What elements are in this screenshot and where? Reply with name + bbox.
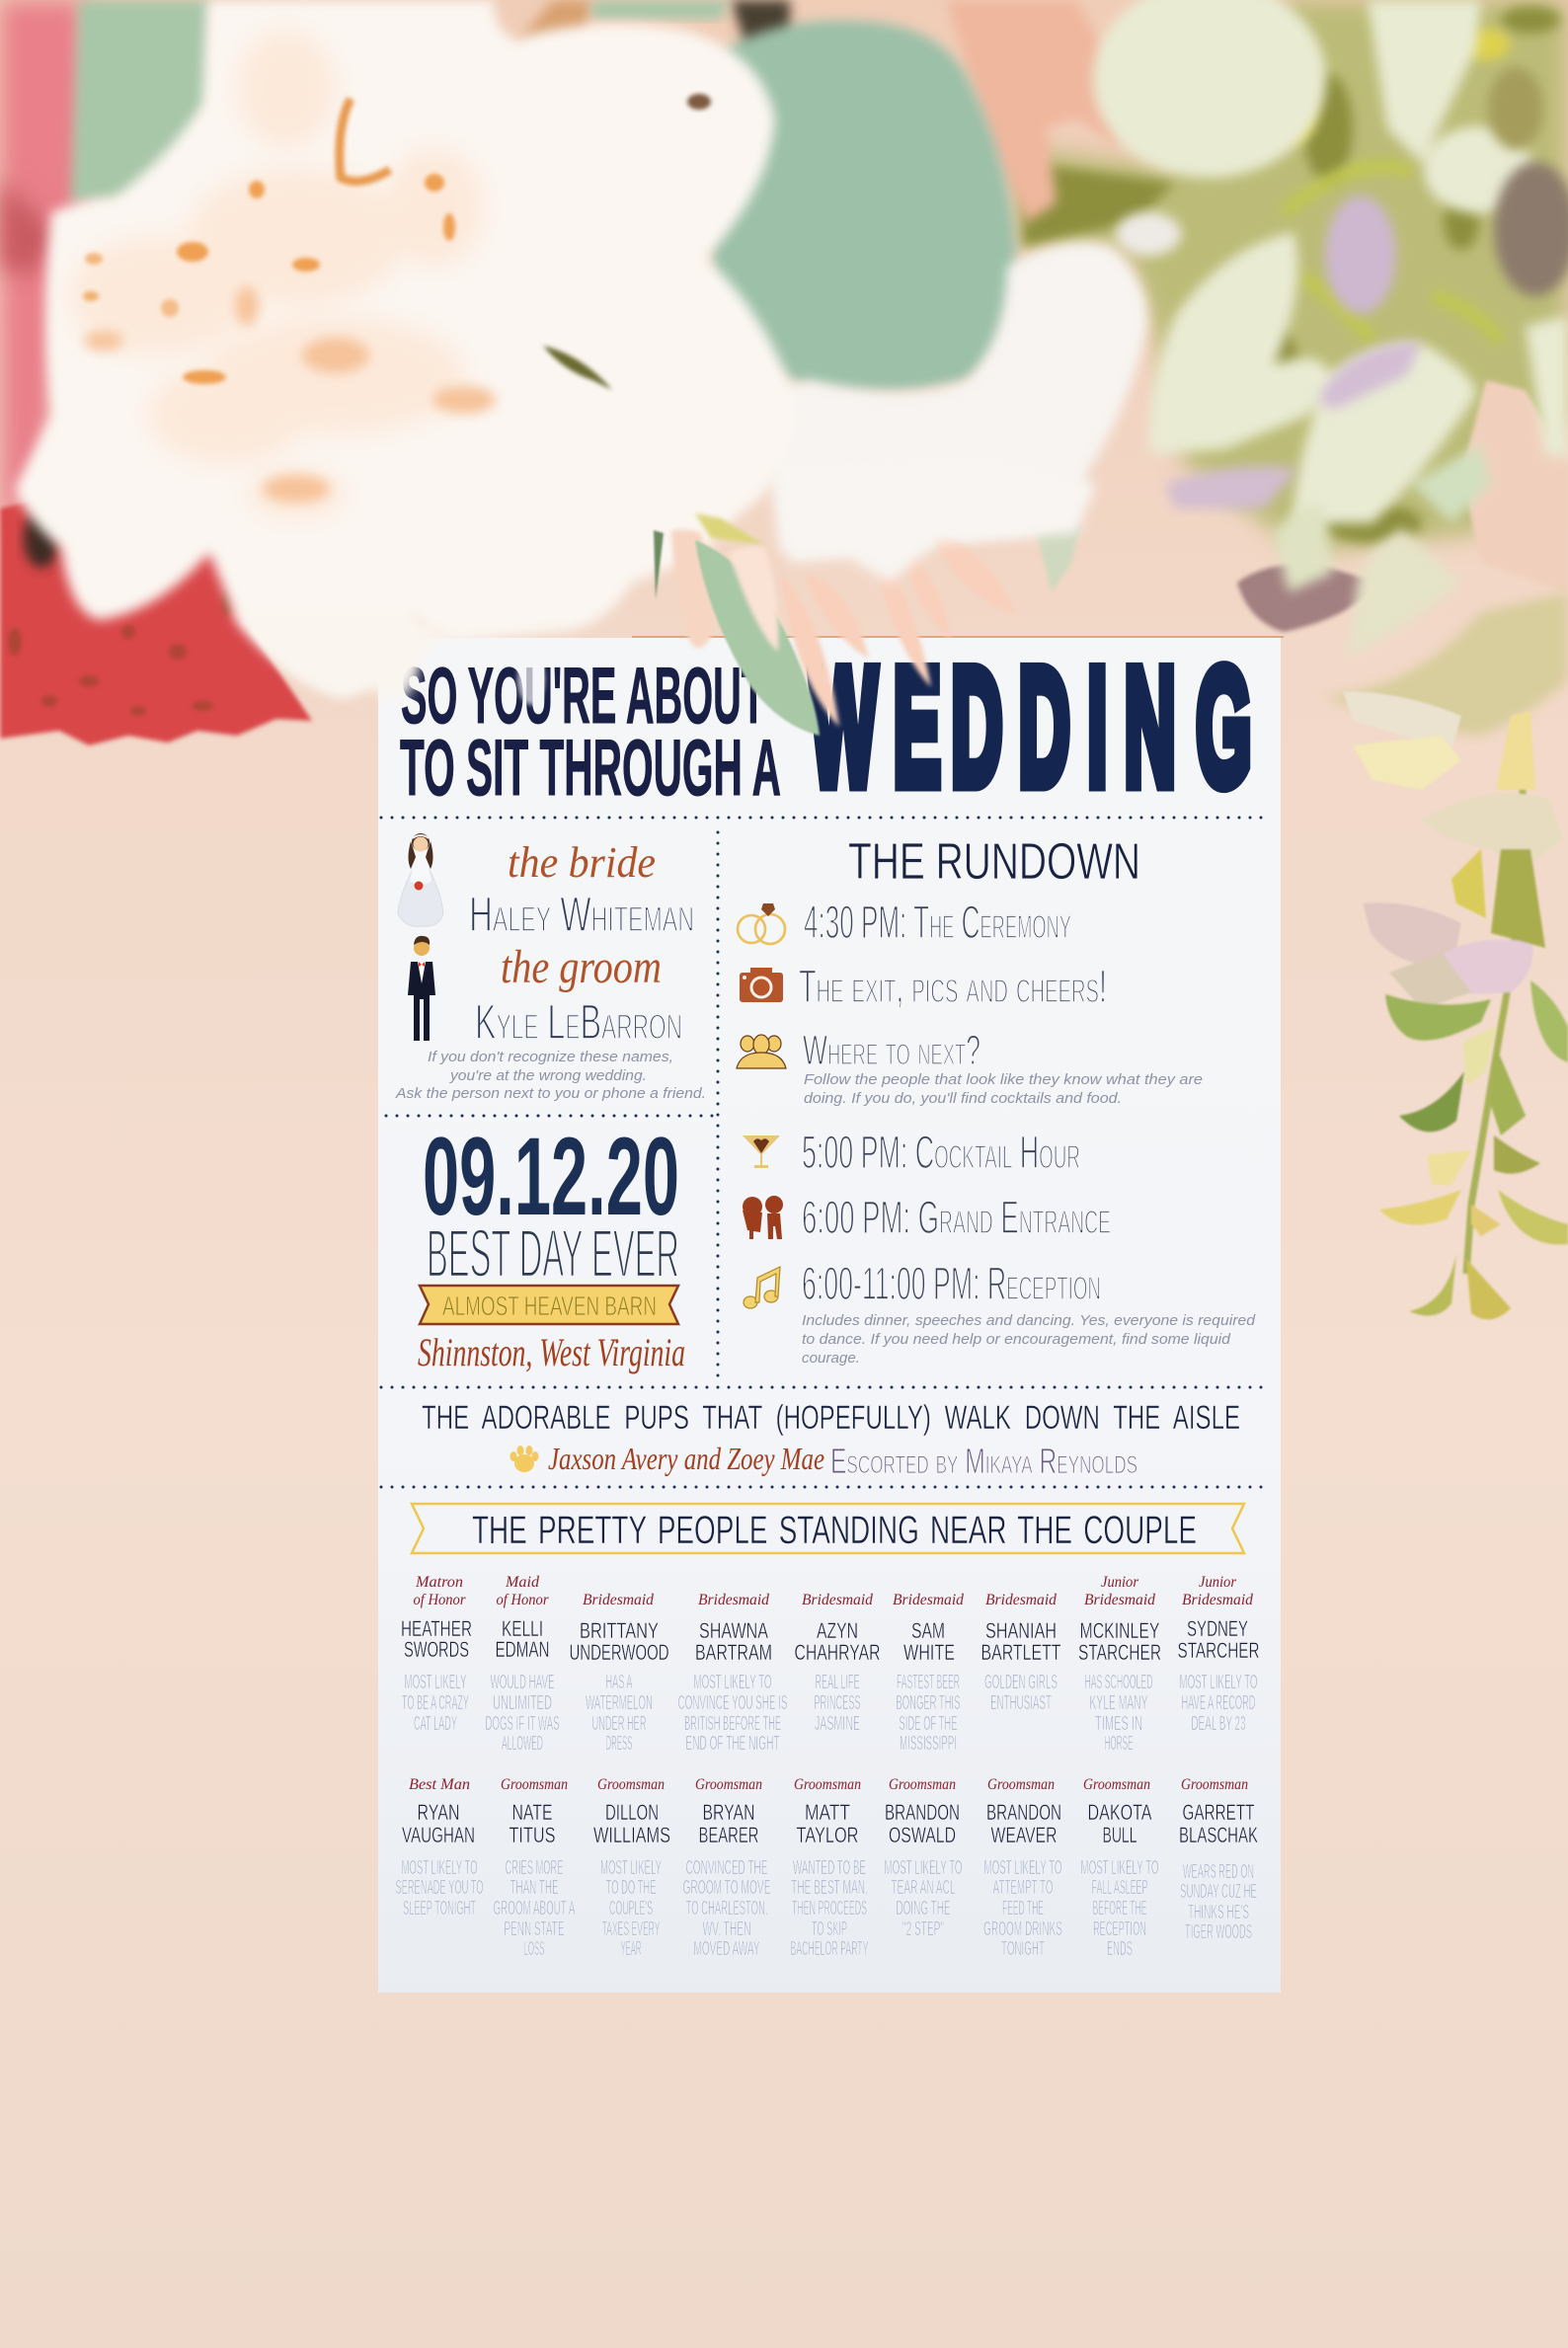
label: the bride: the bride bbox=[508, 838, 656, 887]
attendant: Brandon Weaver: ATTEMPT TO bbox=[993, 1877, 1053, 1899]
panel: the rundown bbox=[737, 833, 1256, 1367]
note: follow the people: Follow the people that look like they know what they are bbox=[804, 1071, 1203, 1088]
attendant: Shawna Bartram bbox=[677, 1592, 788, 1755]
attendant: Nate Titus bbox=[494, 1776, 576, 1960]
item: exit: The exit, pics and cheers! bbox=[799, 960, 1107, 1012]
attendant: Sydney Starcher bbox=[1177, 1574, 1260, 1735]
attendant: Ryan Vaughan: SLEEP TONIGHT bbox=[403, 1898, 476, 1919]
green leaf wide bbox=[1385, 994, 1491, 1041]
attendant: Heather Swords: of Honor bbox=[413, 1592, 466, 1608]
green leaf left bbox=[1399, 1071, 1464, 1132]
cream blossoms upper bbox=[1343, 691, 1461, 750]
name: Kyle LeBarron: Kyle LeBarron bbox=[475, 994, 682, 1050]
attendant: Shawna Bartram: SHAWNA bbox=[699, 1618, 768, 1643]
lilac petal in bouquet bbox=[1325, 196, 1396, 314]
attendant: Garrett Blaschak: BLASCHAK bbox=[1179, 1823, 1258, 1847]
attendant: Azyn Chahryar bbox=[794, 1592, 881, 1735]
pup names: Jaxson Avery and Zoey Mae bbox=[548, 1441, 824, 1476]
attendant: Brandon Weaver: BRANDON bbox=[986, 1800, 1061, 1825]
attendant: Sydney Starcher: Bridesmaid bbox=[1182, 1592, 1254, 1608]
attendant: Brandon Weaver: WEAVER bbox=[991, 1823, 1057, 1847]
note: wrong wedding joke: Ask the person next to you or phone a friend. bbox=[395, 1085, 706, 1102]
ribbon heading: THE PRETTY PEOPLE STANDING NEAR THE COUPLE bbox=[472, 1509, 1197, 1552]
petal tip bbox=[671, 529, 713, 648]
attendant: Matt Taylor: TAYLOR bbox=[796, 1823, 859, 1847]
dark gap by red bloom bbox=[24, 509, 59, 568]
panel: wedding party: FASTEST BEER bbox=[897, 1672, 960, 1693]
attendant: Nate Titus: TITUS bbox=[510, 1823, 555, 1847]
attendant: Matt Taylor bbox=[790, 1776, 869, 1960]
panel: wedding party: CONVINCE YOU SHE IS bbox=[677, 1692, 788, 1714]
panel: wedding party: MOST LIKELY TO bbox=[983, 1857, 1062, 1879]
attendant: Azyn Chahryar: CHAHRYAR bbox=[794, 1640, 881, 1665]
dotted dividers bbox=[381, 818, 1267, 1487]
attendant: Sydney Starcher: DEAL BY 23 bbox=[1191, 1713, 1246, 1735]
attendant: Shaniah Bartlett: GOLDEN GIRLS bbox=[984, 1672, 1058, 1693]
title: so you're about to sit through a wedding bbox=[400, 635, 1251, 820]
attendant: Sam White: Bridesmaid bbox=[893, 1592, 965, 1608]
attendant: Shawna Bartram: MOST LIKELY TO bbox=[693, 1672, 772, 1693]
attendant: Dakota Bull: RECEPTION bbox=[1093, 1918, 1146, 1940]
attendant: Shaniah Bartlett bbox=[981, 1592, 1060, 1714]
bottom of white petal over S bbox=[373, 642, 417, 701]
ribbon heading bbox=[412, 1504, 1244, 1553]
attendant: Kelli Edman: Maid bbox=[505, 1574, 540, 1591]
note: wrong wedding joke bbox=[395, 1049, 706, 1102]
flowers behind the card bbox=[0, 0, 1568, 745]
attendant: Sam White: SAM bbox=[911, 1618, 945, 1643]
orange stamens bbox=[83, 99, 455, 384]
yellow sepal bbox=[695, 513, 765, 545]
attendant: Shawna Bartram: END OF THE NIGHT bbox=[685, 1733, 780, 1755]
attendant: Dakota Bull: FALL ASLEEP bbox=[1092, 1877, 1147, 1899]
flower: pink bloom at left edge bbox=[0, 0, 89, 523]
cream petals: right bouquet bbox=[1093, 0, 1568, 523]
wisteria sprig at right bbox=[1343, 691, 1568, 1319]
attendant: Garrett Blaschak: THINKS HE'S bbox=[1188, 1902, 1249, 1923]
panel: wedding party: TO CHARLESTON, bbox=[685, 1898, 768, 1919]
attendant: McKinley Starcher: MCKINLEY bbox=[1080, 1618, 1160, 1643]
attendant: Kelli Edman: UNLIMITED bbox=[493, 1692, 552, 1714]
escort: Escorted by Mikaya Reynolds bbox=[830, 1441, 1137, 1481]
petal: peach protea top bbox=[946, 0, 1126, 222]
note: wrong wedding joke: If you don't recognize these names, bbox=[428, 1049, 673, 1065]
yellow bud bbox=[1427, 1150, 1471, 1185]
big olive-cream petal right bbox=[1323, 592, 1568, 736]
attendant: Dillon Williams: COUPLE'S bbox=[609, 1898, 653, 1919]
attendant: Sam White: MISSISSIPPI bbox=[900, 1733, 957, 1755]
note: follow the people: doing. If you do, you'll find cocktails and food. bbox=[804, 1090, 1122, 1107]
attendant: Matt Taylor: TO SKIP bbox=[812, 1918, 847, 1940]
attendant: Sam White: SIDE OF THE bbox=[899, 1713, 958, 1735]
icon: bride bbox=[398, 833, 443, 926]
date: 09.12.20 bbox=[423, 1115, 679, 1238]
yellow twig bbox=[1451, 849, 1486, 918]
icon: people bbox=[737, 1035, 786, 1068]
attendant: Ryan Vaughan: Best Man bbox=[409, 1776, 470, 1793]
attendant: Bryan Bearer: GROOM TO MOVE bbox=[683, 1877, 770, 1899]
leaf: sage blade over title bbox=[695, 540, 820, 736]
attendant: Brandon Oswald: DOING THE bbox=[897, 1898, 950, 1919]
yellow blossom bbox=[1353, 736, 1461, 790]
attendant: Brandon Oswald bbox=[885, 1776, 962, 1940]
icon: music note bbox=[744, 1267, 780, 1308]
attendant: Nate Titus: THAN THE bbox=[510, 1877, 559, 1899]
attendant: Dakota Bull: DAKOTA bbox=[1088, 1800, 1152, 1825]
attendant: Garrett Blaschak: TIGER WOODS bbox=[1185, 1921, 1252, 1943]
attendant: Nate Titus: NATE bbox=[511, 1800, 553, 1825]
panel: date and venue bbox=[418, 1115, 685, 1374]
attendant: Nate Titus: CRIES MORE bbox=[506, 1857, 563, 1879]
note: includes dinner: Includes dinner, speeches and dancing. Yes, everyone is required bbox=[802, 1312, 1256, 1329]
attendant: Kelli Edman: EDMAN bbox=[496, 1637, 549, 1662]
attendant: Dakota Bull: BEFORE THE bbox=[1092, 1898, 1147, 1919]
cream petal under bouquet bbox=[1274, 504, 1333, 592]
note: includes dinner bbox=[802, 1312, 1256, 1367]
white flower right of leaf bbox=[760, 243, 1147, 553]
attendant: Dillon Williams: TAXES EVERY bbox=[602, 1918, 660, 1940]
green leaf strip top bbox=[592, 0, 731, 20]
attendant: Heather Swords: MOST LIKELY bbox=[405, 1672, 466, 1693]
attendant: Dillon Williams bbox=[593, 1776, 670, 1960]
panel: wedding party: DOGS IF IT WAS bbox=[486, 1713, 559, 1735]
attendant: Shaniah Bartlett: Bridesmaid bbox=[985, 1592, 1058, 1608]
attendant: Shaniah Bartlett: BARTLETT bbox=[981, 1640, 1060, 1665]
attendant: Brittany Underwood: BRITTANY bbox=[580, 1618, 659, 1643]
attendant: Brandon Oswald: BRANDON bbox=[885, 1800, 960, 1825]
attendant: McKinley Starcher: STARCHER bbox=[1078, 1640, 1161, 1665]
title line two: TO SIT THROUGH A bbox=[400, 724, 781, 813]
attendant: Garrett Blaschak: Groomsman bbox=[1181, 1776, 1248, 1793]
name: Haley Whiteman: Haley Whiteman bbox=[469, 887, 694, 942]
green stem knob bbox=[1491, 849, 1545, 948]
leaf: sage leaf top left bbox=[71, 0, 212, 202]
stem bbox=[1466, 780, 1523, 1274]
attendant: Brittany Underwood: WATERMELON bbox=[586, 1692, 653, 1714]
attendant: Heather Swords: HEATHER bbox=[401, 1616, 472, 1641]
panel: wedding party: HAS SCHOOLED bbox=[1084, 1672, 1153, 1693]
yellow buds bbox=[1239, 29, 1510, 399]
attendant: Garrett Blaschak bbox=[1179, 1776, 1258, 1943]
attendant: Sydney Starcher: Junior bbox=[1199, 1574, 1237, 1591]
mauve seed pod right bbox=[1494, 162, 1568, 296]
card paper bbox=[378, 638, 1281, 1993]
panel: wedding party: TO BE A CRAZY bbox=[402, 1692, 469, 1714]
card: wedding program bbox=[378, 635, 1284, 1993]
leaf mid yellow bbox=[1463, 1027, 1496, 1086]
attendant: Kelli Edman bbox=[486, 1574, 559, 1755]
attendant: Azyn Chahryar: REAL LIFE bbox=[816, 1672, 859, 1693]
attendant: Brandon Weaver: TONIGHT bbox=[1001, 1938, 1045, 1960]
attendant: Brandon Weaver: GROOM DRINKS bbox=[983, 1918, 1062, 1940]
attendant: Heather Swords: SWORDS bbox=[404, 1637, 469, 1662]
attendant: Brandon Weaver: Groomsman bbox=[987, 1776, 1055, 1793]
attendant: McKinley Starcher: Junior bbox=[1101, 1574, 1139, 1591]
attendant: Heather Swords: Matron bbox=[415, 1574, 463, 1591]
attendant: Matt Taylor: MATT bbox=[805, 1800, 850, 1825]
attendant: Dakota Bull bbox=[1080, 1776, 1159, 1960]
card: wedding program: SUNDAY CUZ HE bbox=[1180, 1881, 1257, 1903]
location: Shinnston, West Virginia bbox=[418, 1330, 685, 1374]
note: includes dinner: to dance. If you need help or encouragement, find some liquid bbox=[802, 1331, 1231, 1348]
heading: adorable pups: THE ADORABLE PUPS THAT (HOPEFULLY) WALK DOWN THE AISLE bbox=[422, 1399, 1240, 1437]
pale glass reflection over YOU bbox=[517, 654, 545, 705]
attendant: McKinley Starcher: KYLE MANY bbox=[1090, 1692, 1147, 1714]
attendant: Dillon Williams: YEAR bbox=[620, 1938, 642, 1960]
panel: wedding party: MOST LIKELY TO bbox=[1080, 1857, 1159, 1879]
attendant: Dakota Bull: ENDS bbox=[1107, 1938, 1133, 1960]
ribbon: venue banner bbox=[420, 1286, 678, 1324]
attendant: Brandon Oswald: TEAR AN ACL bbox=[891, 1877, 956, 1899]
ribbon: venue banner: ALMOST HEAVEN BARN bbox=[442, 1291, 657, 1321]
attendant: Kelli Edman: ALLOWED bbox=[502, 1733, 543, 1755]
lilac tips bbox=[1318, 341, 1422, 410]
attendant: Brittany Underwood bbox=[569, 1592, 669, 1755]
attendant: Azyn Chahryar: AZYN bbox=[817, 1618, 858, 1643]
attendant: Kelli Edman: WOULD HAVE bbox=[490, 1672, 555, 1693]
note: follow the people bbox=[804, 1071, 1203, 1107]
attendant: Azyn Chahryar: Bridesmaid bbox=[802, 1592, 874, 1608]
attendant: Heather Swords: CAT LADY bbox=[414, 1713, 457, 1735]
pale orange stamens bbox=[84, 286, 496, 503]
heading: the rundown: THE RUNDOWN bbox=[848, 833, 1140, 891]
icon: cocktail bbox=[743, 1135, 780, 1168]
card top shadow edge bbox=[632, 636, 1284, 638]
pink petal one bbox=[1363, 902, 1461, 966]
attendant: Dillon Williams: WILLIAMS bbox=[593, 1823, 670, 1847]
leaf: big sage leaf center bbox=[691, 21, 1017, 392]
attendant: Heather Swords bbox=[401, 1574, 472, 1735]
white petal base above protea bbox=[780, 454, 1096, 583]
label: the groom: the groom bbox=[501, 941, 662, 993]
panel: wedding party bbox=[395, 1504, 1260, 1960]
icon: groom bbox=[408, 936, 435, 1041]
attendant: Bryan Bearer: Groomsman bbox=[695, 1776, 762, 1793]
panel: wedding party: BRITISH BEFORE THE bbox=[684, 1713, 781, 1735]
dark olive foliage bits bbox=[1022, 6, 1560, 543]
attendant: Matt Taylor: WANTED TO BE bbox=[793, 1857, 866, 1879]
attendant: Dillon Williams: DILLON bbox=[605, 1800, 659, 1825]
attendant: Nate Titus: Groomsman bbox=[501, 1776, 568, 1793]
leaf centre green bbox=[1491, 1047, 1526, 1135]
item: where to next: Where to next? bbox=[803, 1027, 980, 1074]
attendant: Dakota Bull: Groomsman bbox=[1083, 1776, 1150, 1793]
dark corner bbox=[731, 0, 790, 59]
attendant: Shawna Bartram: BARTRAM bbox=[695, 1640, 772, 1665]
panel: wedding party: THEN PROCEEDS bbox=[792, 1898, 867, 1919]
attendant: Sam White: BONGER THIS bbox=[897, 1692, 960, 1714]
small cream petal top right cluster bbox=[1116, 212, 1181, 256]
card: wedding program: WEARS RED ON bbox=[1183, 1861, 1254, 1883]
attendant: Bryan Bearer: CONVINCED THE bbox=[685, 1857, 768, 1879]
attendant: Ryan Vaughan: RYAN bbox=[417, 1800, 460, 1825]
attendant: Sydney Starcher: SYDNEY bbox=[1187, 1616, 1248, 1641]
attendant: Shawna Bartram: Bridesmaid bbox=[698, 1592, 770, 1608]
attendant: Bryan Bearer bbox=[683, 1776, 770, 1960]
icon: wedding rings bbox=[738, 903, 785, 944]
petals: pink protea over title bbox=[729, 525, 1017, 727]
attendant: Bryan Bearer: WV, THEN bbox=[703, 1918, 750, 1940]
attendant: Matt Taylor: Groomsman bbox=[794, 1776, 861, 1793]
title word wedding: WEDDING bbox=[810, 635, 1251, 820]
title: so you're about to sit through a wedding: SO YOU'RE ABOUT bbox=[401, 652, 765, 741]
leaf bud bbox=[1494, 1135, 1540, 1174]
attendant: Sydney Starcher: MOST LIKELY TO bbox=[1179, 1672, 1258, 1693]
item: grand entrance: 6:00 PM: Grand Entrance bbox=[802, 1191, 1111, 1243]
attendant: Bryan Bearer: BEARER bbox=[699, 1823, 758, 1847]
attendant: Brittany Underwood: Bridesmaid bbox=[583, 1592, 655, 1608]
tip left bbox=[1409, 1254, 1456, 1315]
attendant: McKinley Starcher: Bridesmaid bbox=[1084, 1592, 1156, 1608]
olive seed top right bbox=[1488, 67, 1543, 150]
pink petal two bbox=[1445, 940, 1533, 994]
attendant: Sam White: WHITE bbox=[903, 1640, 955, 1665]
attendant: Kelli Edman: of Honor bbox=[496, 1592, 549, 1608]
attendant: Brittany Underwood: HAS A bbox=[606, 1672, 633, 1693]
attendant: Dillon Williams: TO DO THE bbox=[606, 1877, 656, 1899]
green leaf right bbox=[1530, 980, 1568, 1062]
attendant: Nate Titus: PENN STATE bbox=[504, 1918, 565, 1940]
attendant: McKinley Starcher bbox=[1078, 1574, 1161, 1755]
lilac cream blossom bbox=[1422, 793, 1563, 864]
flower shading bbox=[0, 178, 59, 276]
attendant: Matt Taylor: THE BEST MAN, bbox=[791, 1877, 868, 1899]
attendant: Nate Titus: LOSS bbox=[523, 1938, 545, 1960]
yellow green stems bbox=[1284, 166, 1501, 341]
panel: couple bbox=[395, 833, 706, 1102]
note: includes dinner: courage. bbox=[802, 1350, 860, 1367]
red bloom dark texture bbox=[8, 588, 233, 716]
attendant: Shaniah Bartlett: SHANIAH bbox=[985, 1618, 1057, 1643]
leaf: small pale leaf bbox=[1037, 523, 1081, 592]
tip right bbox=[1466, 1259, 1511, 1319]
dark speck in white petal bbox=[687, 94, 711, 110]
warm centre blobs of white flower bbox=[69, 30, 484, 517]
attendant: Brandon Weaver: FEED THE bbox=[1002, 1898, 1044, 1919]
flower: red bloom lower left bbox=[0, 494, 312, 745]
yellow sepals bbox=[1496, 711, 1535, 790]
foliage backdrop upper right bbox=[1017, 0, 1568, 553]
attendant: Brittany Underwood: UNDER HER bbox=[592, 1713, 646, 1735]
leaf right lower bbox=[1498, 1190, 1568, 1244]
icon: couple kissing bbox=[743, 1196, 783, 1239]
attendant: Sydney Starcher: STARCHER bbox=[1177, 1638, 1260, 1663]
attendant: Bryan Bearer: MOVED AWAY bbox=[693, 1938, 760, 1960]
item: ceremony: 4:30 PM: The Ceremony bbox=[804, 896, 1071, 948]
attendant: Brandon Oswald: OSWALD bbox=[889, 1823, 956, 1847]
mauve leaf lower bbox=[1237, 563, 1377, 632]
attendant: Ryan Vaughan: VAUGHAN bbox=[402, 1823, 475, 1847]
panel: wedding party: BACHELOR PARTY bbox=[790, 1938, 869, 1960]
item: cocktail hour: 5:00 PM: Cocktail Hour bbox=[802, 1126, 1080, 1178]
stem tan bbox=[504, 0, 592, 59]
white petal blur over title start bbox=[237, 612, 464, 696]
attendant: Brandon Weaver bbox=[983, 1776, 1062, 1960]
leaf blade dark bbox=[654, 530, 664, 599]
attendant: Garrett Blaschak: GARRETT bbox=[1183, 1800, 1254, 1825]
attendant: Kelli Edman: KELLI bbox=[502, 1616, 543, 1641]
attendant: Shaniah Bartlett: ENTHUSIAST bbox=[990, 1692, 1052, 1714]
dark gap in white petals bbox=[543, 346, 612, 390]
attendant: Ryan Vaughan bbox=[395, 1776, 484, 1919]
panel: wedding party: MOST LIKELY TO bbox=[885, 1857, 962, 1879]
cloth gap among foliage bbox=[1461, 380, 1568, 592]
note: wrong wedding joke: you're at the wrong wedding. bbox=[449, 1067, 647, 1084]
attendant: Azyn Chahryar: JASMINE bbox=[815, 1713, 860, 1735]
attendant: Ryan Vaughan: MOST LIKELY TO bbox=[401, 1857, 478, 1879]
mauve petal three bbox=[1389, 953, 1471, 1009]
attendant: Azyn Chahryar: PRINCESS bbox=[814, 1692, 861, 1714]
icon: camera bbox=[740, 968, 783, 1002]
panel: wedding party: GROOM ABOUT A bbox=[494, 1898, 576, 1919]
attendant: Dillon Williams: MOST LIKELY bbox=[600, 1857, 662, 1879]
small yellow bud bbox=[1471, 1205, 1501, 1236]
flowers in front of the card bbox=[237, 454, 1096, 736]
attendant: Bryan Bearer: BRYAN bbox=[703, 1800, 754, 1825]
yellow leaf left bbox=[1379, 1190, 1461, 1225]
attendant: McKinley Starcher: HORSE bbox=[1104, 1733, 1134, 1755]
card: wedding program: HAVE A RECORD bbox=[1181, 1692, 1256, 1714]
attendant: Dakota Bull: BULL bbox=[1102, 1823, 1137, 1847]
icon: paw print bbox=[510, 1446, 539, 1472]
attendant: Brittany Underwood: UNDERWOOD bbox=[569, 1640, 669, 1665]
attendant: Sam White bbox=[893, 1592, 965, 1755]
attendant: Dillon Williams: Groomsman bbox=[597, 1776, 665, 1793]
card: wedding program: BEST DAY EVER bbox=[427, 1215, 679, 1291]
attendant: Brandon Oswald: "2 STEP" bbox=[902, 1918, 944, 1940]
attendant: McKinley Starcher: TIMES IN bbox=[1095, 1713, 1142, 1735]
panel: pups bbox=[422, 1399, 1240, 1481]
item: reception: 6:00-11:00 PM: Reception bbox=[802, 1257, 1101, 1309]
attendant: Brandon Oswald: Groomsman bbox=[889, 1776, 956, 1793]
large white flower with orange centre bbox=[15, 0, 795, 696]
cream petal drop bbox=[1348, 528, 1461, 657]
attendant: Brittany Underwood: DRESS bbox=[606, 1733, 632, 1755]
panel: wedding party: SERENADE YOU TO bbox=[395, 1877, 484, 1899]
